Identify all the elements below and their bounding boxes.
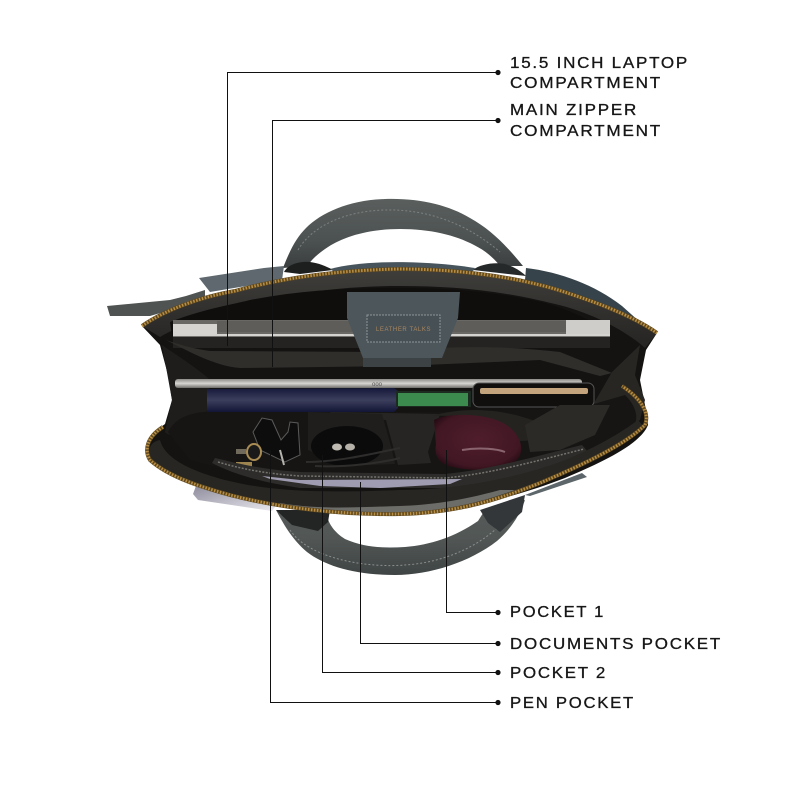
callout: pocket 2 xyxy=(322,455,607,682)
callout: 15.5 inch laptop compartment: 15.5 INCH LAPTOP xyxy=(510,55,689,72)
leather flap xyxy=(347,292,460,367)
left interior side xyxy=(162,345,210,435)
upper zipper xyxy=(142,269,657,333)
bag body xyxy=(142,269,657,514)
callout: main zipper compartment: MAIN ZIPPER xyxy=(510,102,638,119)
black wallet xyxy=(473,383,594,407)
grey weave band xyxy=(280,490,515,514)
side tab xyxy=(107,290,205,316)
documents xyxy=(262,476,462,488)
lower front rim xyxy=(149,420,645,513)
callout: documents pocket xyxy=(360,482,722,653)
lower lining xyxy=(168,395,636,482)
callout: pocket 1: POCKET 1 xyxy=(510,604,605,621)
callout: main zipper compartment: COMPARTMENT xyxy=(510,123,662,140)
bag illustration xyxy=(107,199,657,575)
callout: pocket 2: POCKET 2 xyxy=(510,665,607,682)
callout: pen pocket: PEN POCKET xyxy=(510,695,635,712)
callout: 15.5 inch laptop compartment: COMPARTMENT xyxy=(510,75,662,92)
maroon case xyxy=(434,415,521,470)
callout: documents pocket: DOCUMENTS POCKET xyxy=(510,636,722,653)
tablet: ooo xyxy=(372,382,383,388)
back panel, blue-grey xyxy=(199,262,640,322)
upper interior lining xyxy=(170,288,606,336)
upper rim xyxy=(142,269,657,348)
grey fabric pocket divider xyxy=(330,405,610,465)
top handle xyxy=(283,199,526,276)
callout: 15.5 inch laptop compartment xyxy=(228,55,689,346)
green notebook xyxy=(396,391,471,407)
laptop sleeve lip xyxy=(166,340,612,376)
callout: pocket 1 xyxy=(446,450,605,621)
tablet xyxy=(175,379,582,388)
bottom panel tabs xyxy=(193,473,587,511)
laptop xyxy=(173,320,610,348)
pens and key ring xyxy=(236,418,300,468)
front pocket strip xyxy=(212,445,588,488)
callout: main zipper compartment xyxy=(272,102,662,367)
right interior side xyxy=(535,345,645,465)
callout: pen pocket xyxy=(270,450,635,712)
glasses case xyxy=(306,412,400,466)
bottom handle xyxy=(276,495,525,575)
navy folder xyxy=(207,388,398,412)
lower zipper xyxy=(147,386,646,514)
brand patch: LEATHER TALKS xyxy=(376,327,431,333)
